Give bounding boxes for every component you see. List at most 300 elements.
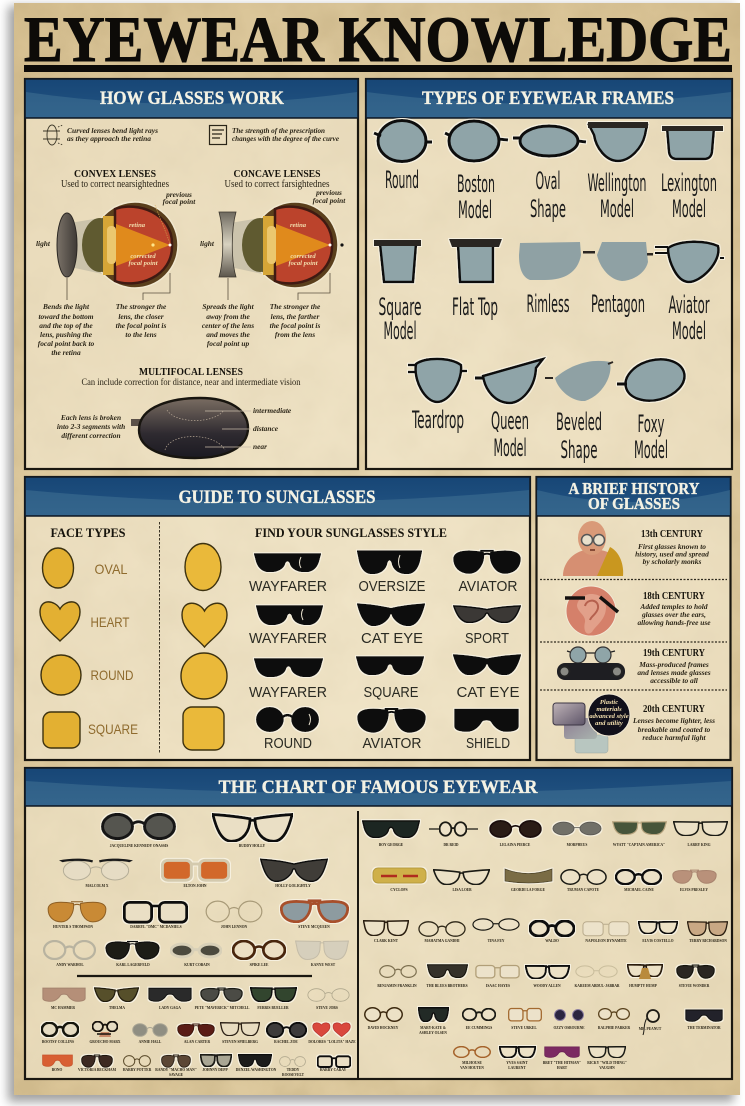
- diagram: multifocal lens: [131, 398, 292, 458]
- face: square: SQUARE: [88, 721, 138, 737]
- frame: rimless: [519, 242, 595, 318]
- glasses: Kareem Abdul-Jabbar: KAREEM ABDUL-JABBAR: [574, 984, 620, 988]
- sunglasses: wayfarer oval: [249, 554, 327, 595]
- heading: how glasses work: HOW GLASSES WORK: [100, 89, 285, 109]
- diagram: concave lens and eye: corrected: [290, 253, 316, 260]
- frame: square model: Square: [378, 293, 422, 321]
- text: segments: different correction: [61, 431, 121, 440]
- frame: rimless: Rimless: [526, 290, 570, 318]
- panel: chart of famous eyewear: [25, 768, 732, 1079]
- diagram: multifocal lens: near: [253, 442, 267, 451]
- diagram: multifocal lens: distance: [253, 424, 279, 433]
- text: concave effect: center of the lens: [202, 321, 254, 330]
- glasses: Larry King: LARRY KING: [687, 843, 711, 847]
- glasses: Malcolm X: [59, 859, 133, 888]
- subheading: concave: Used to correct farsightednes: [224, 179, 330, 190]
- text: segments: Each lens is broken: [60, 413, 121, 422]
- glasses: Mr Peanut: MR. PEANUT: [639, 1027, 662, 1031]
- glasses: Elvis Presley: [673, 870, 716, 892]
- glasses: Darryl DMC McDaniels: [124, 902, 187, 929]
- glasses: Jacqueline Kennedy Onassis: [102, 814, 174, 848]
- frame: round: [374, 120, 432, 194]
- text: 19th century: [637, 648, 711, 685]
- sunglasses: aviator oval: [454, 551, 520, 595]
- glasses: Woody Allen: WOODY ALLEN: [533, 984, 561, 988]
- glasses: Terry Richardson: [687, 922, 728, 943]
- glasses: Truman Capote: [561, 870, 606, 892]
- frame: beveled shape: [545, 361, 613, 464]
- glasses: Bono: BONO: [52, 1068, 62, 1072]
- glasses: Milhouse Van Houten: MILHOUSE: [462, 1061, 482, 1065]
- text: 19th century: accessible to all: [650, 676, 699, 685]
- glasses: John Lennon: [206, 901, 262, 929]
- heading: concave lenses: CONCAVE LENSES: [234, 168, 320, 180]
- glasses: Waldo: WALDO: [545, 939, 559, 943]
- glasses: Darryl DMC McDaniels: DARRYL "DMC" MCDANIELS: [130, 925, 182, 929]
- glasses: Holly Golightly: [261, 859, 327, 888]
- glasses: Mahatma Gandhi: MAHATMA GANDHI: [425, 939, 460, 943]
- face: heart large: [182, 603, 227, 647]
- text: 13th century: [635, 529, 709, 566]
- diagram: convex lens and eye: [36, 190, 196, 300]
- text: 20th century: reduce harmful light: [642, 733, 707, 742]
- glasses: Spike Lee: [233, 941, 285, 967]
- frame: wellington model: Model: [600, 195, 634, 223]
- text: convex effect: Bends the light: [42, 302, 90, 311]
- text: 18th century: [637, 591, 711, 627]
- text: 13th century: First glasses known to: [638, 542, 706, 551]
- frame: pentagon: Pentagon: [591, 290, 645, 318]
- text: 18th century: 18th CENTURY: [643, 591, 705, 602]
- heading: convex lenses: CONVEX LENSES: [74, 168, 156, 180]
- sunglasses: oversize: OVERSIZE: [358, 579, 426, 595]
- text: concave effect: and moves the: [206, 330, 250, 339]
- glasses: Andy Warhol: [44, 941, 95, 967]
- text: 20th century: [632, 704, 715, 742]
- glasses: Morpheus: [553, 822, 601, 847]
- glasses: Yves Saint Laurent: [499, 1047, 536, 1070]
- frame: lexington model: [661, 126, 723, 223]
- glasses: Waldo: [530, 921, 574, 943]
- frame: lexington model: Model: [672, 195, 706, 223]
- text: 19th century: and lenses made glasses: [637, 668, 711, 677]
- text: concave effect: away from the: [206, 312, 250, 321]
- sunglasses: sport: [454, 606, 520, 647]
- frame: oval shape: [513, 126, 586, 223]
- glasses: Milhouse Van Houten: [454, 1047, 490, 1070]
- frame: aviator model: Aviator: [668, 291, 710, 319]
- glasses: Morpheus: MORPHEUS: [567, 843, 587, 847]
- glasses: Kurt Cobain: [171, 944, 221, 967]
- glasses: Alan Carter: ALAN CARTER: [184, 1040, 210, 1044]
- frame: teardrop: Teardrop: [411, 406, 464, 434]
- diagram: convex lens and eye: corrected: [130, 253, 156, 260]
- glasses: Harry Caray: [318, 1056, 350, 1072]
- glasses: Isaac Hayes: ISAAC HAYES: [486, 984, 510, 988]
- sunglasses: cat eye heart: CAT EYE: [361, 631, 423, 647]
- glasses: Boy George: [363, 821, 419, 847]
- glasses: Geordi La Forge: [505, 869, 552, 892]
- glasses: Ferris Bueller: [250, 988, 297, 1010]
- glasses: Victoria Beckham: VICTORIA BECKHAM: [78, 1068, 117, 1072]
- text: 20th century: Lenses become lighter, less: [632, 716, 715, 725]
- text: concave strength: lens, the farther: [271, 312, 319, 321]
- heading: guide to sunglasses: GUIDE TO SUNGLASSES: [178, 487, 376, 508]
- glasses: Lelaina Pierce: LELAINA PIERCE: [500, 843, 531, 847]
- sunglasses: oversize: [358, 551, 426, 595]
- subheading: convex: Used to correct nearsightednes: [61, 179, 169, 190]
- heading: find your sunglasses style: FIND YOUR SUNGLASSES STYLE: [255, 526, 447, 540]
- glasses: Mary-Kate and Ashley Olsen: MARY-KATE &: [420, 1026, 446, 1030]
- frame: round: Round: [385, 166, 419, 194]
- text: curved lenses: Curved lenses bend light rays: [67, 126, 158, 135]
- glasses: Ozzy Osbourne: [553, 1010, 585, 1030]
- glasses: Bret The Hitman Hart: BRET "THE HITMAN": [543, 1061, 581, 1065]
- frame: foxy model: [617, 353, 689, 464]
- frame: boston model: Boston: [457, 170, 495, 198]
- glasses: Karl Lagerfeld: [106, 942, 159, 967]
- glasses: Thelma: [94, 988, 139, 1010]
- glasses: Denzel Washington: [236, 1055, 277, 1072]
- text: 19th century: 19th CENTURY: [643, 648, 705, 659]
- frame: aviator model: [655, 242, 724, 345]
- glasses: Lady Gaga: LADY GAGA: [159, 1006, 181, 1010]
- glasses: The Terminator: [686, 1010, 722, 1030]
- face: square: [43, 712, 138, 748]
- glasses: Yves Saint Laurent: LAURENT: [508, 1066, 526, 1070]
- glasses: Boy George: BOY GEORGE: [379, 843, 404, 847]
- face: oval large: [185, 544, 221, 590]
- glasses: Thelma: THELMA: [109, 1006, 125, 1010]
- glasses: Ricky Wild Thing Vaughn: [587, 1047, 627, 1070]
- text: convex effect: focal point back to: [38, 339, 95, 348]
- text: curved lenses: as they approach the retina: [67, 134, 151, 143]
- glasses: Clark Kent: [363, 921, 409, 943]
- text: 18th century: Added temples to hold: [639, 602, 708, 611]
- diagram: concave lens and eye: previous: [315, 188, 342, 197]
- glasses: David Hockney: DAVID HOCKNEY: [368, 1026, 399, 1030]
- sunglasses: square: [357, 657, 423, 701]
- diagram: convex lens and eye: retina: [129, 222, 146, 229]
- glasses: Wyatt Captain America: [613, 822, 666, 847]
- frame: queen model: Model: [494, 434, 526, 462]
- glasses: Stevie Wonder: STEVIE WONDER: [679, 984, 710, 988]
- sunglasses: aviator square: AVIATOR: [362, 736, 422, 752]
- diagram: concave lens and eye: retina: [290, 222, 307, 229]
- glasses: Harry Caray: HARRY CARAY: [320, 1068, 347, 1072]
- glasses: Lady Gaga: [149, 988, 191, 1010]
- text: prescription strength: changes with the degree of the curve: [232, 134, 340, 143]
- diagram: convex lens and eye: focal point: [163, 197, 196, 206]
- frame: wellington model: [588, 122, 648, 223]
- glasses: Kurt Cobain: KURT COBAIN: [184, 963, 210, 967]
- glasses: John Lennon: JOHN LENNON: [221, 925, 248, 929]
- sunglasses: cat eye heart: [358, 604, 424, 647]
- text: convex effect: toward the bottom: [38, 312, 94, 321]
- glasses: Milhouse Van Houten: VAN HOUTEN: [460, 1066, 484, 1070]
- text: 18th century: allowing hands-free use: [637, 618, 711, 627]
- glasses: Andy Warhol: ANDY WARHOL: [56, 963, 84, 967]
- sunglasses: round: [257, 708, 318, 752]
- face: round large: [181, 653, 227, 699]
- glasses: Pete Maverick Mitchell: [195, 988, 250, 1010]
- glasses: EE Cummings: EE CUMMINGS: [466, 1026, 492, 1030]
- glasses: Ferris Bueller: FERRIS BUELLER: [257, 1006, 289, 1010]
- panel: guide to sunglasses: [25, 477, 530, 760]
- diagram: concave lens and eye: focal point: [313, 196, 346, 205]
- glasses: Mary-Kate and Ashley Olsen: ASHLEY OLSEN: [419, 1031, 447, 1035]
- glasses: Annie Hall: ANNIE HALL: [139, 1040, 162, 1044]
- glasses: Karl Lagerfeld: KARL LAGERFELD: [116, 963, 150, 967]
- frame: queen model: [475, 359, 543, 462]
- glasses: Hunter S Thompson: HUNTER S THOMPSON: [53, 925, 93, 929]
- glasses: MC Hammer: MC HAMMER: [51, 1006, 75, 1010]
- text: convex effect: lens, pushing the: [40, 330, 93, 339]
- glasses: Dolores Lolita Haze: DOLORES "LOLITA" HAZE: [308, 1040, 356, 1044]
- glasses: Annie Hall: [133, 1024, 167, 1044]
- frame: flat top: [449, 239, 502, 321]
- icon: plastic lenses: advanced style: [589, 713, 629, 720]
- glasses: Teddy Roosevelt: [280, 1057, 305, 1077]
- glasses: Stevie Wonder: [677, 965, 714, 988]
- glasses: Spike Lee: SPIKE LEE: [250, 963, 269, 967]
- glasses: Randy Macho Man Savage: SAVAGE: [169, 1073, 184, 1077]
- glasses: Kanye West: [296, 941, 348, 967]
- glasses: Ricky Wild Thing Vaughn: RICKY "WILD THING": [587, 1061, 627, 1065]
- face: oval: OVAL: [94, 561, 128, 577]
- glasses: Teddy Roosevelt: ROOSEVELT: [282, 1073, 305, 1077]
- sunglasses: sport: SPORT: [465, 631, 509, 647]
- sunglasses: cat eye round: CAT EYE: [456, 685, 520, 701]
- glasses: Terry Richardson: TERRY RICHARDSON: [689, 939, 727, 943]
- glasses: Elvis Costello: ELVIS COSTELLO: [642, 939, 674, 943]
- glasses: Randy Macho Man Savage: RANDY "MACHO MAN": [155, 1068, 197, 1072]
- text: segments: into 2-3 segments with: [57, 422, 125, 431]
- glasses: Bret The Hitman Hart: HART: [557, 1066, 568, 1070]
- glasses: Napoleon Dynamite: [583, 922, 629, 943]
- text: concave strength: from the lens: [275, 330, 315, 339]
- frame: boston model: Model: [458, 196, 492, 224]
- frame: pentagon: [591, 242, 653, 318]
- icon: curved lens: [43, 125, 63, 145]
- glasses: Buddy Holly: BUDDY HOLLY: [239, 844, 265, 848]
- glasses: Steven Spielberg: [220, 1023, 260, 1044]
- glasses: Wyatt Captain America: WYATT "CAPTAIN AMERICA": [613, 843, 665, 847]
- glasses: Steven Spielberg: STEVEN SPIELBERG: [222, 1040, 258, 1044]
- glasses: Ricky Wild Thing Vaughn: VAUGHN: [599, 1066, 615, 1070]
- glasses: Mahatma Gandhi: [419, 922, 465, 943]
- sunglasses: wayfarer round: [249, 659, 327, 701]
- panel: how glasses work: [25, 79, 358, 469]
- heading: brief history: A BRIEF HISTORY: [568, 479, 700, 498]
- glasses: Johnny Depp: JOHNNY DEPP: [202, 1068, 228, 1072]
- diagram: convex lens and eye: previous: [165, 190, 192, 199]
- text: concave effect: focal point up: [207, 339, 249, 348]
- frame: teardrop: [408, 359, 467, 434]
- glasses: Mr Peanut: [639, 1010, 662, 1035]
- glasses: Woody Allen: [525, 966, 570, 988]
- diagram: convex lens and eye: light: [36, 239, 51, 248]
- glasses: Napoleon Dynamite: NAPOLEON DYNAMITE: [585, 939, 627, 943]
- face: square large: [183, 707, 224, 750]
- glasses: Isaac Hayes: [476, 966, 519, 988]
- glasses: Elvis Costello: [638, 922, 678, 943]
- sunglasses: round: ROUND: [264, 736, 312, 752]
- sunglasses: wayfarer oval: WAYFARER: [249, 579, 327, 595]
- heading: face types: FACE TYPES: [50, 526, 126, 540]
- frame: square model: [374, 240, 422, 345]
- sunglasses: wayfarer round: WAYFARER: [249, 685, 327, 701]
- text: 20th century: 20th CENTURY: [643, 704, 705, 715]
- sunglasses: aviator square: [358, 709, 425, 752]
- frame: aviator model: Model: [672, 317, 706, 345]
- glasses: Benjamin Franklin: BENJAMIN FRANKLIN: [377, 984, 417, 988]
- icon: plastic lenses: Plastic: [600, 699, 618, 706]
- glasses: Hunter S Thompson: [48, 902, 106, 929]
- frame: foxy model: Model: [634, 436, 668, 464]
- glasses: Tina Fey: [473, 919, 519, 943]
- text: 19th century: Mass-produced frames: [638, 660, 709, 669]
- glasses: Kanye West: KANYE WEST: [311, 963, 336, 967]
- glasses: Geordi La Forge: GEORDI LA FORGE: [511, 888, 546, 892]
- glasses: EE Cummings: [463, 1009, 495, 1030]
- glasses: Denzel Washington: DENZEL WASHINGTON: [236, 1068, 277, 1072]
- glasses: Lisa Loeb: [434, 870, 489, 892]
- glasses: MC Hammer: [43, 988, 85, 1010]
- glasses: Harry Potter: HARRY POTTER: [123, 1068, 152, 1072]
- text: convex strength: lens, the closer: [118, 312, 164, 321]
- glasses: Bono: [43, 1055, 72, 1072]
- icon: monk with glasses: [563, 521, 623, 576]
- frame: foxy model: Foxy: [638, 410, 665, 438]
- glasses: Cyclops: [373, 868, 426, 892]
- face: heart: HEART: [90, 614, 130, 630]
- glasses: Rachel Zoe: RACHEL ZOE: [274, 1040, 298, 1044]
- glasses: The Blues Brothers: [426, 965, 468, 988]
- heading: chart of famous eyewear: THE CHART OF FAMOUS EYEWEAR: [218, 777, 538, 798]
- glasses: Alan Carter: [178, 1024, 214, 1044]
- glasses: Groucho Marx: GROUCHO MARX: [89, 1040, 121, 1044]
- icon: conveyor with glasses: [557, 647, 625, 680]
- text: convex effect: the retina: [51, 348, 81, 357]
- glasses: Mary-Kate and Ashley Olsen: [418, 1008, 449, 1035]
- text: convex strength: to the lens: [125, 330, 157, 339]
- sunglasses: aviator oval: AVIATOR: [458, 579, 518, 595]
- diagram: concave lens and eye: focal point: [288, 260, 318, 267]
- frame: square model: Model: [384, 317, 416, 345]
- glasses: Humpty Hump: HUMPTY HUMP: [629, 984, 658, 988]
- heading: multifocal lenses: MULTIFOCAL LENSES: [139, 366, 243, 378]
- glasses: Humpty Hump: [627, 965, 663, 988]
- text: 13th century: 13th CENTURY: [641, 529, 703, 540]
- glasses: Elvis Presley: ELVIS PRESLEY: [680, 888, 708, 892]
- glasses: Steve Urkel: STEVE URKEL: [511, 1026, 537, 1030]
- text: convex effect: and the top of the: [39, 321, 93, 330]
- glasses: Steve Jobs: STEVE JOBS: [316, 1006, 338, 1010]
- glasses: Randy Macho Man Savage: [155, 1055, 197, 1077]
- glasses: Elton John: ELTON JOHN: [183, 884, 207, 888]
- glasses: Dolores Lolita Haze: [308, 1023, 356, 1044]
- glasses: Steve McQueen: [281, 901, 348, 929]
- glasses: Ralphie Parker: RALPHIE PARKER: [598, 1026, 630, 1030]
- glasses: Yves Saint Laurent: YVES SAINT: [506, 1061, 528, 1065]
- diagram: multifocal lens: intermediate: [253, 406, 292, 415]
- diagram: concave lens and eye: light: [200, 239, 215, 248]
- diagram: convex lens and eye: focal point: [128, 260, 158, 267]
- face: round: ROUND: [90, 667, 134, 683]
- glasses: Steve Jobs: [308, 989, 349, 1010]
- glasses: Harry Potter: [123, 1056, 152, 1072]
- panel: brief history of glasses: [536, 477, 730, 760]
- glasses: Rachel Zoe: [267, 1023, 306, 1044]
- glasses: Michael Caine: [616, 870, 661, 892]
- sunglasses: wayfarer heart: [249, 606, 327, 647]
- heading: types of eyewear frames: TYPES OF EYEWEAR FRAMES: [422, 89, 674, 109]
- panel: types of eyewear frames: [366, 79, 732, 469]
- glasses: Holly Golightly: HOLLY GOLIGHTLY: [275, 884, 311, 888]
- icon: ear with temple: [565, 586, 618, 636]
- frame: queen model: Queen: [491, 407, 529, 435]
- glasses: Ralphie Parker: [598, 1009, 630, 1030]
- diagram: concave lens and eye: [200, 188, 346, 300]
- text: prescription strength: The strength of the prescription: [232, 126, 325, 135]
- frame: oval shape: Oval: [536, 167, 560, 195]
- frame: beveled shape: Beveled: [556, 408, 602, 436]
- glasses: Truman Capote: TRUMAN CAPOTE: [567, 888, 600, 892]
- frame: oval shape: Shape: [530, 195, 566, 223]
- glasses: Johnny Depp: [200, 1055, 232, 1072]
- text: convex strength: the focal point is: [116, 321, 166, 330]
- text: concave strength: The stronger the: [270, 302, 321, 311]
- text: 18th century: glasses over the ears,: [641, 610, 706, 619]
- glasses: Larry King: [674, 822, 727, 847]
- text: concave strength: the focal point is: [270, 321, 320, 330]
- glasses: Victoria Beckham: [78, 1055, 117, 1072]
- sunglasses: wayfarer heart: WAYFARER: [249, 631, 327, 647]
- glasses: Dr Reid: [429, 822, 478, 847]
- text: concave effect: Spreads the light: [202, 302, 255, 311]
- glasses: Teddy Roosevelt: TEDDY: [287, 1068, 300, 1072]
- glasses: Benjamin Franklin: [377, 966, 417, 988]
- icon: document: [210, 126, 226, 144]
- glasses: Michael Caine: MICHAEL CAINE: [624, 888, 655, 892]
- face: oval: [42, 548, 128, 588]
- glasses: Steve McQueen: STEVE MCQUEEN: [298, 925, 330, 929]
- face: heart: [40, 602, 130, 641]
- glasses: Lisa Loeb: LISA LOEB: [452, 888, 472, 892]
- glasses: Lelaina Pierce: [490, 821, 541, 847]
- glasses: Malcolm X: MALCOLM X: [85, 884, 109, 888]
- glasses: Dr Reid: DR REID: [443, 843, 459, 847]
- glasses: Groucho Marx: [89, 1022, 121, 1044]
- glasses: Bootsy Collins: [42, 1023, 78, 1044]
- sunglasses: square: SQUARE: [364, 685, 419, 701]
- icon: plastic lenses: [553, 694, 630, 753]
- text: 20th century: breakable and coated to: [638, 725, 711, 734]
- icon: plastic lenses: and utility: [595, 720, 623, 727]
- frame: flat top: Flat Top: [452, 293, 498, 321]
- glasses: Ozzy Osbourne: OZZY OSBOURNE: [553, 1026, 585, 1030]
- glasses: Cyclops: CYCLOPS: [390, 888, 408, 892]
- text: 13th century: by scholarly monks: [643, 557, 701, 566]
- glasses: The Blues Brothers: THE BLUES BROTHERS: [426, 984, 468, 988]
- glasses: Bret The Hitman Hart: [543, 1047, 581, 1070]
- frame: boston model: [445, 121, 508, 224]
- subheading: multifocal: Can include correction for distance, near and intermediate vision: [82, 377, 301, 388]
- glasses: Jacqueline Kennedy Onassis: JACQUELINE KENNEDY ONASSIS: [110, 844, 168, 848]
- glasses: Buddy Holly: [213, 814, 292, 848]
- glasses: Kareem Abdul-Jabbar: [574, 966, 620, 988]
